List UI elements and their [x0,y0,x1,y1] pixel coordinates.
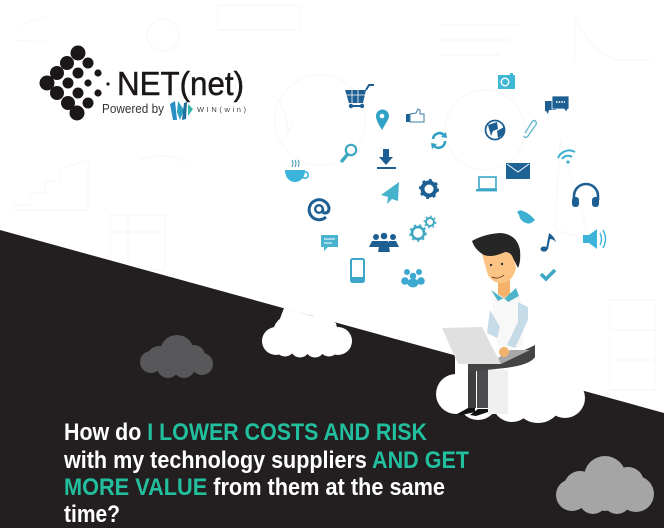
icon: wifi [558,150,575,164]
headline [63,419,469,528]
headline: with my technology suppliers AND GET [63,447,469,474]
icon: thumbs up [406,109,424,122]
icon: download [377,149,396,169]
icon: two gears [410,216,436,241]
WIN(win) text: WIN(win) [197,105,246,114]
icon: headphones [572,184,599,207]
icon: paper plane [381,182,399,204]
dark diagonal background panel [0,230,664,528]
seat shadow on cloud [488,370,508,414]
light grey cloud [556,456,654,514]
lower legs [468,366,476,408]
shoes [457,408,475,415]
logo mark: dot arrow [40,46,110,120]
icon: gear [420,180,438,198]
icon: at sign [309,200,329,220]
laptop [442,327,501,364]
icon: envelope [506,163,530,179]
icon: speech bubbles [545,96,569,114]
icon: laptop [476,177,497,191]
face [482,250,516,283]
icon: WIN logo mark [170,101,193,120]
icon cloud [285,73,606,288]
icon: camera [498,73,515,89]
icon: three users [369,233,399,252]
logo: NET(net) Powered by WIN(win) [40,46,246,120]
icon: speaker [583,229,606,249]
headline: MORE VALUE from them at the same [64,474,445,501]
shirt [492,296,524,352]
hand [499,347,509,357]
white cloud left [262,308,352,358]
collar [491,288,519,302]
icon: magnifier [342,145,356,161]
icon: paper clip [524,120,536,138]
icon: chat bubble [321,235,338,251]
neck [498,280,510,298]
headline: time? [64,501,120,528]
logo wordmark: NET(net) [117,65,244,102]
sleeves [487,310,500,338]
hair [472,233,520,268]
eyes and mouth [490,263,504,278]
icon: check mark [541,270,555,279]
icon: map pin [376,110,389,130]
headline: How do I LOWER COSTS AND RISK [64,419,428,446]
icon: bird [517,210,535,224]
icon: sync arrows [431,132,447,149]
dark grey cloud [140,335,213,378]
icon: globe [486,120,504,140]
white cloud under man [436,350,585,423]
thigh [468,345,535,372]
icon: smartphone [351,259,364,282]
man with laptop [442,233,535,416]
icon: shopping cart [345,85,374,108]
icon: coffee cup [285,160,308,182]
powered by text: Powered by [102,102,165,116]
icon: user group [401,269,425,288]
icon: music note [540,233,556,252]
